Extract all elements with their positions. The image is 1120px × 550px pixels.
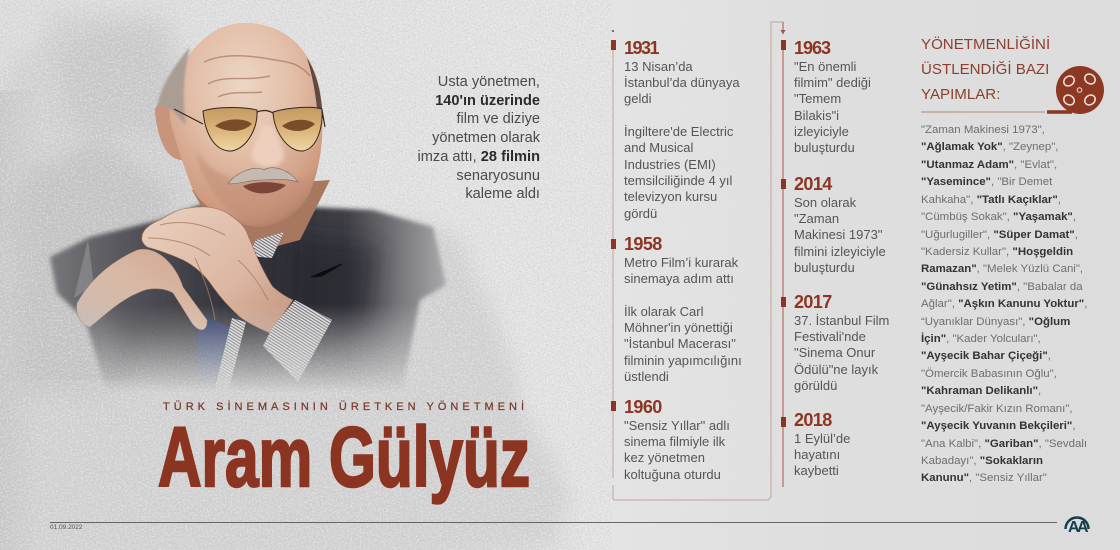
face shading (197, 156, 304, 212)
entry 1931: Industries (EMI) (624, 157, 716, 172)
film list: "Yasemince", "Bir Demet (921, 176, 1052, 188)
entry 1958: filminin yapımcılığını (624, 353, 742, 368)
film list: Ramazan", "Melek Yüzlü Cani", (921, 263, 1083, 275)
entry 1963: filmim" dediği (794, 75, 871, 90)
films heading: YÖNETMENLİĞİNİ (921, 36, 1050, 53)
marker 1960 (611, 401, 616, 411)
ear (155, 104, 182, 160)
entry 1958: sinemaya adım attı (624, 271, 734, 286)
entry 1931: İngiltere'de Electric (624, 124, 733, 139)
marker 1931 (611, 40, 616, 50)
entry 1931: 1931 (624, 38, 658, 58)
entry 1958: Metro Film’i kurarak (624, 254, 738, 270)
entry 1958: "İstanbul Macerası" (624, 336, 736, 351)
entry 1963: 1963 (794, 38, 830, 58)
upper hand (142, 207, 293, 333)
entry 2017 (794, 292, 889, 393)
film list: Kanunu", "Sensiz Yıllar" (921, 472, 1047, 484)
film list: "Zaman Makinesi 1973", (921, 124, 1045, 136)
entry 2014: Son olarak (794, 194, 856, 210)
mouth (243, 182, 286, 193)
marker 1958 (611, 239, 616, 249)
entry 1963: buluşturdu (794, 140, 855, 155)
entry 1958: Möhner'in yönettiği (624, 320, 733, 335)
intro text: 140'ın üzerinde (435, 93, 540, 109)
entry 1931: and Musical (624, 140, 693, 155)
entry 1960: "Sensiz Yıllar" adlı (624, 418, 730, 432)
entry 1963: "En önemli (794, 58, 856, 74)
intro text: film ve diziye (456, 111, 540, 127)
film list: "Ana Kalbi", "Gariban", "Sevdalı (921, 438, 1087, 450)
dark jacket folds (291, 234, 390, 342)
marker 2014 (781, 179, 786, 189)
marker 2017 (781, 297, 786, 307)
intro text: kaleme aldı (465, 186, 540, 202)
entry 1960: koltuğuna oturdu (624, 467, 721, 482)
jacket (50, 205, 446, 400)
entry 1931: 13 Nisan’da (624, 58, 693, 74)
title: Aram Gülyüz (158, 410, 530, 504)
entry 1931 (624, 38, 740, 221)
entry 2017: görüldü (794, 378, 837, 393)
film list: Ağlar", "Aşkın Kanunu Yoktur", (921, 298, 1087, 310)
entry 2017: 2017 (794, 292, 832, 312)
film list: "Utanmaz Adam", "Evlat", (921, 159, 1057, 171)
entry 1958: üstlendi (624, 369, 669, 384)
film list: "Ağlamak Yok", "Zeynep", (921, 141, 1058, 153)
entry 1963: "Temem (794, 91, 841, 106)
entry 1958: İlk olarak Carl (624, 304, 703, 319)
icon: film reel (921, 66, 1104, 114)
moustache (228, 168, 298, 184)
film list: "Ayşecik Yuvanın Bekçileri", (921, 420, 1076, 432)
entry 1960: kez yönetmen (624, 450, 705, 465)
entry 2014 (794, 174, 886, 275)
film list (921, 124, 1087, 484)
film list: "Ömercik Babasının Oğlu", (921, 368, 1057, 380)
film list: "Ayşecik/Fakir Kızın Romanı", (921, 403, 1073, 415)
glasses (174, 107, 325, 151)
icon: AA logo: AA (1068, 519, 1089, 536)
neck (192, 180, 330, 250)
entry 2018: 2018 (794, 410, 832, 430)
entry 1963 (794, 38, 871, 155)
entry 2014: "Zaman (794, 211, 839, 226)
entry 2014: 2014 (794, 174, 832, 194)
date: 01.09.2022 (50, 524, 83, 531)
forehead wrinkles (204, 56, 310, 97)
lower hand (77, 249, 207, 330)
film list: "Cümbüş Sokak", "Yaşamak", (921, 211, 1076, 223)
subtitle: TÜRK SİNEMASININ ÜRETKEN YÖNETMENİ (163, 401, 528, 413)
entry 1931: gördü (624, 206, 657, 221)
intro text (418, 74, 540, 202)
film list: “Uyanıklar Dünyası", "Oğlum (921, 316, 1070, 328)
entry 2014: filmini izleyiciyle (794, 244, 886, 259)
entry 1960: sinema filmiyle ilk (624, 434, 725, 449)
films heading: YAPIMLAR: (921, 86, 1000, 103)
entry 2018: hayatını (794, 447, 840, 462)
head (169, 23, 323, 227)
marker 1963 (781, 40, 786, 50)
entry 2017: 37. İstanbul Film (794, 312, 889, 328)
shirt and tie (252, 232, 284, 258)
film list: "Kadersiz Kullar", "Hoşgeldin (921, 246, 1073, 258)
entry 1960: 1960 (624, 397, 662, 417)
icon: AA logo (1064, 516, 1090, 536)
intro text: senaryosunu (456, 168, 540, 184)
films heading (921, 36, 1050, 103)
grey hair (157, 47, 190, 125)
entry 2018 (794, 410, 850, 478)
entry 1931: temsilciliğinde 4 yıl (624, 173, 732, 188)
films heading: ÜSTLENDİĞİ BAZI (921, 61, 1049, 78)
film list: "Ayşecik Bahar Çiçeği", (921, 350, 1051, 362)
footer rule (50, 522, 1057, 523)
entry 1963: Bilakis"i (794, 108, 839, 123)
entry 2017: Festivali'nde (794, 329, 866, 344)
entry 1931: İstanbul’da dünyaya (624, 75, 740, 90)
entry 1931: televizyon kursu (624, 189, 717, 204)
entry 2014: Makinesi 1973" (794, 227, 882, 242)
entry 2017: Ödülü"ne layık (794, 362, 878, 377)
entry 1963: izleyiciyle (794, 124, 849, 139)
marker 2018 (781, 417, 786, 427)
striped cuff (263, 300, 332, 382)
entry 2017: "Sinema Onur (794, 345, 875, 360)
intro text: yönetmen olarak (432, 130, 540, 146)
film list: "Günahsız Yetim", "Babalar da (921, 281, 1083, 293)
entry 1931: geldi (624, 91, 651, 106)
film list: İçin", "Kader Yolcuları", (921, 333, 1041, 345)
entry 1958: 1958 (624, 234, 662, 254)
intro text: imza attı, 28 filmin (418, 149, 540, 165)
entry 2018: 1 Eylül’de (794, 430, 850, 446)
film list: "Kahraman Delikanlı", (921, 385, 1041, 397)
intro text: Usta yönetmen, (438, 74, 540, 90)
entry 2018: kaybetti (794, 463, 839, 478)
nose (252, 125, 284, 167)
film list: Kabadayı", "Sokakların (921, 455, 1043, 467)
entry 2014: buluşturdu (794, 260, 855, 275)
entry 1960 (624, 397, 730, 482)
film list: "Uğurlugiller", "Süper Damat", (921, 229, 1078, 241)
portrait photo of Aram Gülyüz (48, 23, 448, 388)
film list: Kahkaha", "Tatlı Kaçıklar", (921, 194, 1061, 206)
entry 1958 (624, 234, 742, 384)
